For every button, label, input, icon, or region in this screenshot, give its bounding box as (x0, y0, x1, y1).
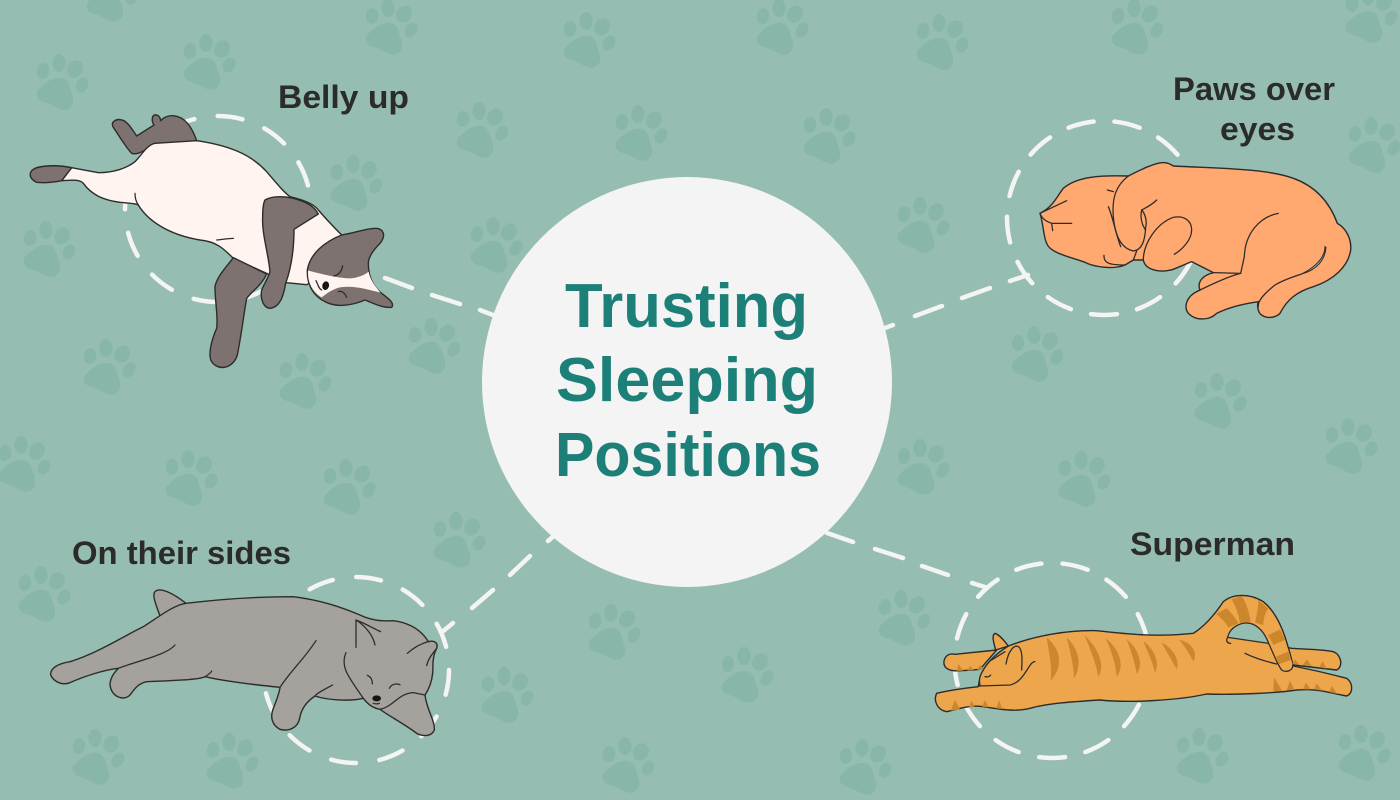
cat: belly up (30, 115, 393, 367)
dashed connector: paws over eyes (885, 275, 1028, 328)
dashed ring: paws over eyes (995, 109, 1213, 327)
label: On their sides: On their sides (72, 535, 291, 571)
label: Superman: Superman (1130, 526, 1295, 562)
dashed ring: on their sides (263, 577, 449, 763)
dashed connector: on their sides (442, 535, 555, 632)
dashed connector: belly up (385, 278, 493, 315)
dashed ring: belly up (125, 116, 311, 302)
label: Belly up: Belly up (278, 79, 409, 115)
centre circle with title: Trusting (565, 272, 808, 341)
label: Paws over eyes (1173, 71, 1335, 147)
cat: paws over eyes (1040, 163, 1351, 319)
dashed ring: superman (942, 551, 1162, 770)
centre circle with title: Sleeping (556, 346, 818, 415)
cat: on their sides (51, 590, 437, 736)
cat: superman (935, 595, 1352, 712)
dashed connector: superman (827, 533, 985, 587)
centre circle with title: Positions (555, 421, 821, 490)
centre circle with title (482, 177, 892, 587)
label: Paws over eyes: eyes (1220, 111, 1295, 147)
label: Paws over eyes: Paws over (1173, 71, 1335, 107)
